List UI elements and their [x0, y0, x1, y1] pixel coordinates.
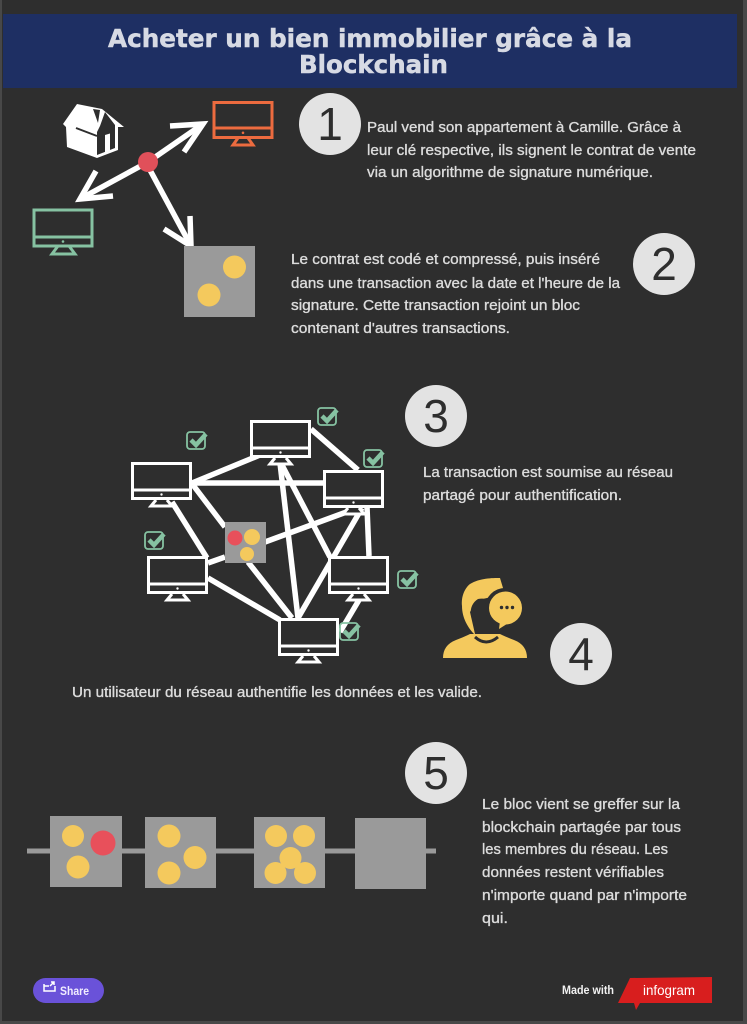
made with infogram logo	[562, 977, 712, 1010]
step 5 number	[405, 742, 467, 804]
block 2	[145, 817, 216, 888]
chain line	[27, 848, 436, 854]
made with infogram logo: Made with	[562, 985, 614, 997]
share button	[33, 978, 104, 1003]
icon: user with speech bubble	[443, 578, 527, 658]
step 3 network diagram	[132, 408, 417, 662]
step 3 number	[405, 385, 467, 447]
title banner: Acheter un bien immobilier grâce à la	[108, 24, 632, 53]
step 1 illustration	[34, 102, 272, 317]
red signature dot	[138, 152, 158, 172]
step 3 number: 3	[423, 390, 449, 442]
blockchain diagram	[27, 816, 436, 889]
step 1 number	[299, 93, 361, 155]
title banner	[3, 14, 737, 88]
step 1 number: 1	[317, 98, 343, 150]
step 5 text: Le bloc vient se greffer sur la	[482, 796, 681, 813]
step 5 text: blockchain partagée par tous	[482, 819, 681, 836]
step 2 text: dans une transaction avec la date et l'heure de la	[291, 275, 621, 292]
icon: green monitor	[34, 210, 92, 254]
central block	[225, 522, 266, 563]
step 2 text: signature. Cette transaction rejoint un bloc	[291, 297, 581, 314]
step 2 text: Le contrat est codé et compressé, puis inséré	[291, 251, 600, 268]
monitor: bottom	[280, 620, 338, 662]
title banner: Blockchain	[299, 50, 448, 79]
made with infogram logo: infogram	[643, 982, 695, 998]
step 1 text: leur clé respective, ils signent le contrat de vente	[367, 142, 696, 159]
step 1 text: via un algorithme de signature numérique.	[367, 164, 653, 181]
step 5 text: n'importe quand par n'importe	[482, 887, 687, 904]
step 5 text	[482, 796, 687, 927]
icon: orange monitor	[214, 102, 272, 145]
network links	[172, 429, 369, 632]
monitor: right	[324, 472, 382, 514]
step 5 text: données restent vérifiables	[482, 864, 664, 881]
icon: house	[63, 104, 124, 158]
monitor: left	[132, 464, 190, 506]
monitor: top	[252, 422, 310, 464]
transaction block	[184, 246, 255, 317]
step 1 text: Paul vend son appartement à Camille. Grâce à	[367, 119, 682, 136]
arrows from signature point	[80, 124, 203, 246]
monitor: lower right	[330, 558, 388, 600]
step 2 number	[633, 233, 695, 295]
step 4 text: Un utilisateur du réseau authentifie les données et les valide.	[72, 684, 482, 701]
step 5 text: qui.	[482, 910, 508, 927]
validation checks	[145, 408, 417, 640]
step 4 number: 4	[568, 628, 594, 680]
block 1	[50, 816, 122, 887]
block 3	[254, 817, 325, 888]
step 5 number: 5	[423, 747, 449, 799]
step 1 text	[367, 119, 696, 181]
monitor: lower left	[148, 558, 206, 600]
share button: Share	[60, 984, 89, 998]
step 2 number: 2	[651, 238, 677, 290]
step 3 text	[423, 464, 673, 504]
step 3 text: partagé pour authentification.	[423, 487, 622, 504]
step 3 text: La transaction est soumise au réseau	[423, 464, 673, 481]
step 2 text: contenant d'autres transactions.	[291, 320, 510, 337]
step 4 number	[550, 623, 612, 685]
block 4 empty	[355, 818, 426, 889]
step 5 text: les membres du réseau. Les	[482, 841, 668, 858]
step 2 text	[291, 251, 621, 337]
